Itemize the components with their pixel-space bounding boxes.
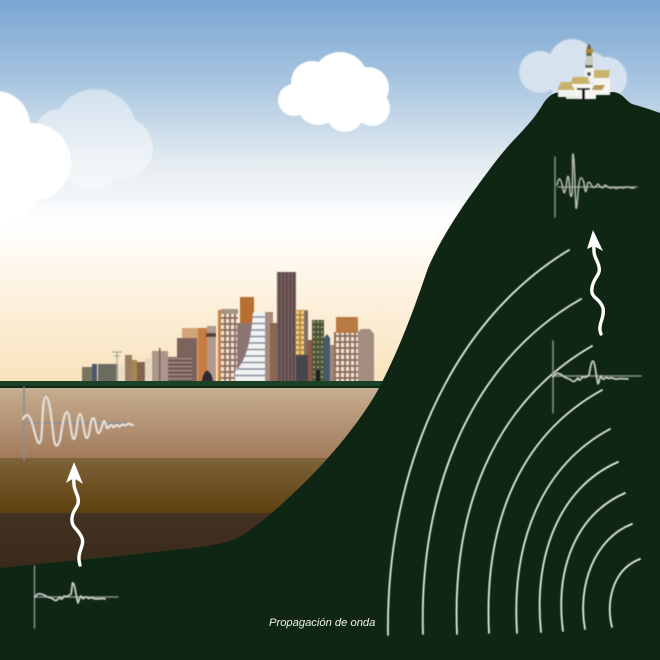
buildings: [594, 70, 610, 80]
tall central buildings: [218, 272, 334, 382]
layer: dark brown: [0, 513, 300, 573]
seismogram: basin surface: [23, 387, 133, 460]
ground strip: [0, 381, 385, 386]
arrow: basin upward wave: [66, 462, 83, 565]
hilltop town: [557, 43, 610, 101]
church tower: [585, 43, 593, 71]
right-hand buildings: [334, 317, 374, 382]
small low buildings: [82, 348, 168, 382]
cloud: behind hilltop: [519, 39, 627, 108]
sky background: [0, 0, 660, 385]
layer: light tan: [0, 388, 390, 458]
mid rise group: [168, 326, 216, 382]
label: wave propagation: Propagación de onda: [269, 617, 375, 629]
cloud: centre: [278, 52, 390, 132]
seismogram: hill base: [553, 341, 641, 413]
layer: mid brown: [0, 458, 340, 513]
soil layers: [0, 388, 390, 573]
wave propagation arcs: [388, 250, 640, 635]
city skyline: [82, 272, 374, 382]
seismogram: hilltop: [555, 154, 637, 217]
cloud: pale left: [34, 89, 153, 190]
arrow: hill upward wave: [587, 230, 603, 334]
seismogram: basin bedrock: [34, 566, 118, 628]
cloud: white left: [0, 91, 71, 221]
